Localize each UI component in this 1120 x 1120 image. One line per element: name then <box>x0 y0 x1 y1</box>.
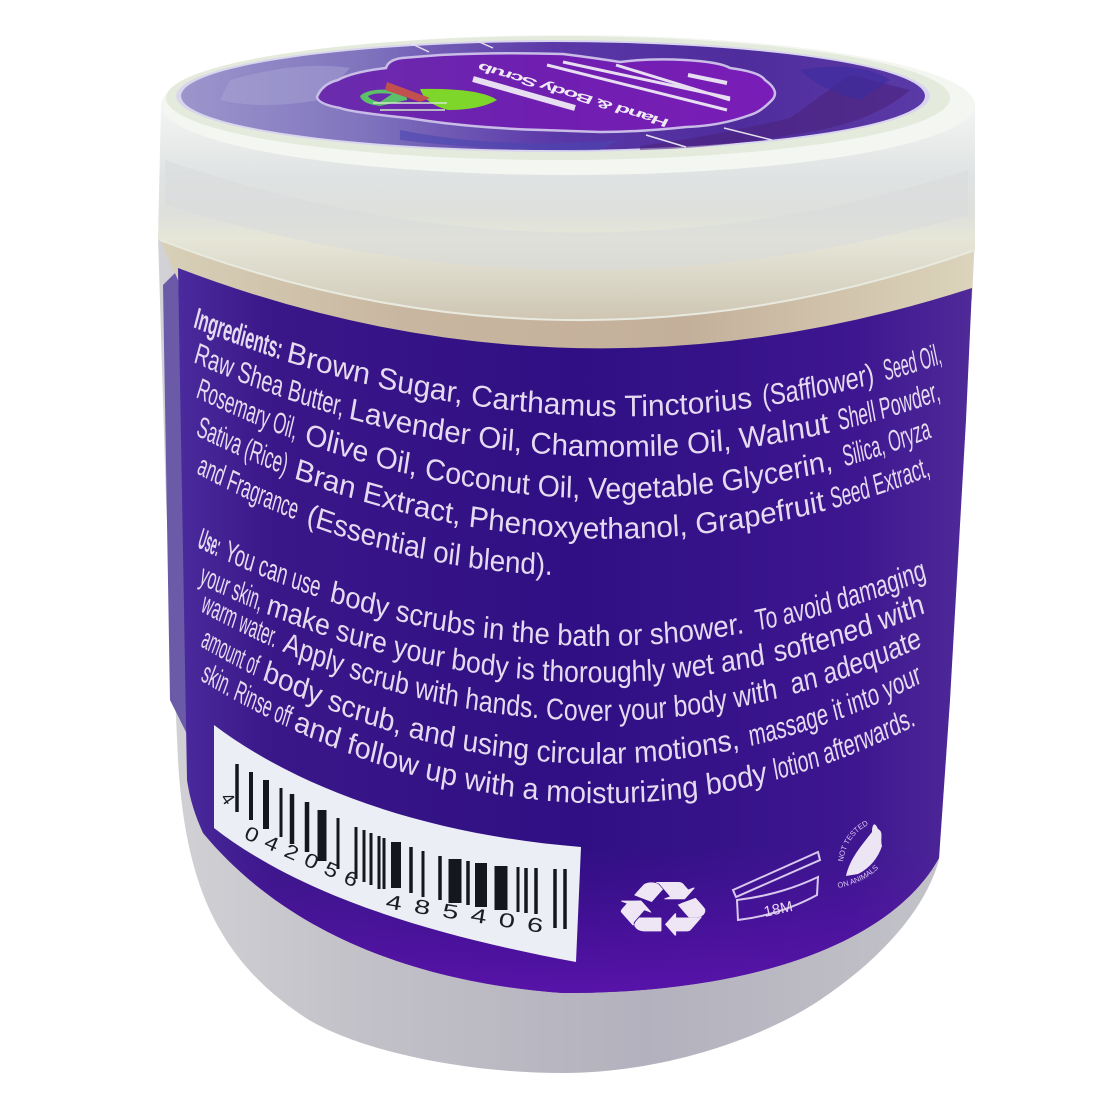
use instructions text block: softened with <box>774 596 924 662</box>
ingredients text block: (Essential oil blend). <box>308 505 550 581</box>
icon: not tested on animals: ON ANIMALS <box>838 865 878 888</box>
icon: 18 month jar: 18M <box>762 898 794 921</box>
lid small print lines <box>473 62 730 110</box>
lid top sticker <box>176 40 930 152</box>
use instructions text block: skin. Rinse off <box>201 665 294 727</box>
use instructions text block: body scrubs in the bath or shower. <box>330 580 742 646</box>
icon: not tested on animals <box>838 821 882 888</box>
use instructions text block: and follow up with a moisturizing body <box>294 717 766 804</box>
jar body <box>158 235 975 1073</box>
ingredients text block: Brown Sugar, Carthamus Tinctorius <box>288 342 752 416</box>
lid rim <box>161 35 975 175</box>
ingredients text block: Shell Powder, <box>838 386 940 430</box>
use instructions text block: your skin, <box>197 568 260 614</box>
ingredients text block: Sativa (Rice) <box>197 418 288 480</box>
use instructions text block: body scrub, and using circular motions, <box>264 660 738 766</box>
ingredients text block: Lavender Oil, Chamomile Oil, Walnut <box>350 398 830 457</box>
jar lid side <box>158 105 975 320</box>
icon: recycle: ♻ <box>612 865 714 953</box>
barcode <box>214 725 581 962</box>
use instructions text block: Use: <box>198 528 220 556</box>
ingredients text block: Raw Shea Butter, <box>194 343 342 420</box>
ingredients text block: Silica, Oryza <box>842 423 932 466</box>
lid logo <box>360 82 497 110</box>
use instructions text block: lotion afterwards. <box>772 712 915 780</box>
ingredients text block: Ingredients: <box>194 308 282 359</box>
icon: not tested on animals: NOT TESTED <box>838 821 868 862</box>
use instructions text block: make sure your body is thoroughly wet and <box>267 599 764 688</box>
ingredients text block: and Fragrance <box>198 460 298 519</box>
ingredients text block: Rosemary Oil, <box>196 378 295 443</box>
use instructions text block: You can use <box>228 540 320 596</box>
use instructions text block: To avoid damaging <box>754 564 926 630</box>
back label panel <box>178 268 972 993</box>
barcode: 485406 <box>384 891 557 940</box>
ingredients text block: Olive Oil, Coconut Oil, Vegetable Glycerin, <box>306 426 832 505</box>
use instructions text block <box>197 528 926 804</box>
use instructions text block: amount of <box>201 633 262 676</box>
ingredients text block: (Safflower) <box>764 364 873 412</box>
lid product name: Hand & Body Scrub <box>475 60 672 129</box>
barcode: 042056 <box>241 821 370 895</box>
use instructions text block: massage it into your <box>749 668 920 746</box>
ingredients text block <box>194 308 942 581</box>
barcode: 4 <box>217 789 239 808</box>
use instructions text block: an adequate <box>792 633 920 694</box>
icon: 18 month jar <box>733 852 820 921</box>
ingredients text block: Bran Extract, Phenoxyethanol, Grapefruit <box>296 459 826 544</box>
lid plaque <box>317 53 775 132</box>
use instructions text block: Apply scrub with hands. Cover your body with <box>282 634 777 727</box>
use instructions text block: warm water. <box>202 596 276 648</box>
ingredients text block: Seed Extract, <box>830 459 930 508</box>
ingredients text block: Seed Oil, <box>884 344 942 380</box>
